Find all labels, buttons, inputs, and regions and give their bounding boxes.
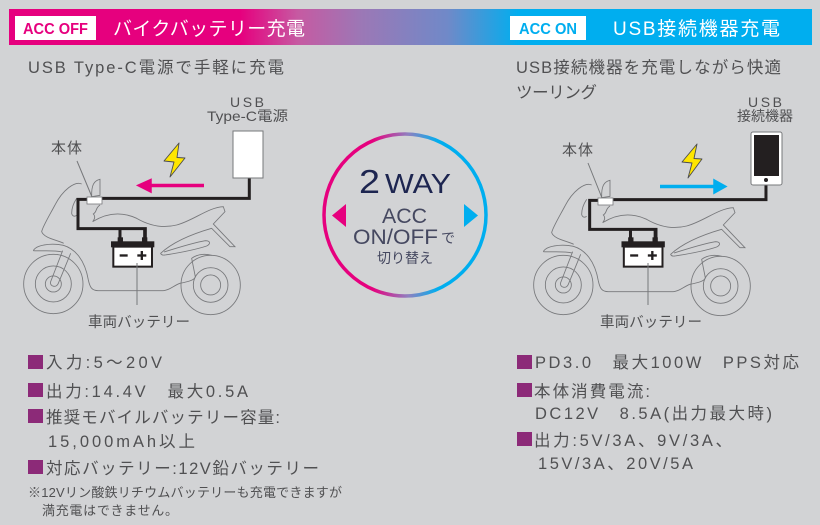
ring xyxy=(324,134,486,296)
text: ACC ON/OFF switching: ACC xyxy=(382,205,427,228)
spec: current consumption xyxy=(517,382,772,423)
text: ACC ON/OFF switching xyxy=(353,205,455,266)
spec list: ACC ON xyxy=(517,353,800,473)
label: USB device xyxy=(737,94,793,124)
motorcycle outline xyxy=(534,180,750,316)
text: ACC ON/OFF switching: ON/OFF xyxy=(353,226,438,249)
icon: smartphone xyxy=(751,132,782,185)
spec: current consumption: DC12V 8.5A(出力最大時) xyxy=(535,404,772,423)
badge: ACC OFF: ACC OFF xyxy=(23,21,88,38)
spec: current consumption: 本体消費電流: xyxy=(534,382,650,401)
motorcycle outline xyxy=(24,179,240,315)
wiring xyxy=(78,178,249,238)
badge: ACC ON: ACC ON xyxy=(519,21,577,38)
unit box xyxy=(598,198,613,205)
label: USB device: USB xyxy=(748,94,782,110)
label: USB Type-C power: Type-C電源 xyxy=(207,108,288,124)
text: ACC ON/OFF switching: で xyxy=(441,230,455,246)
spec: recommended capacity: 推奨モバイルバッテリー容量: xyxy=(46,408,280,427)
spec: recommended capacity xyxy=(28,408,280,451)
arrow: right blue xyxy=(464,204,478,227)
right subheading: USB接続機器を充電しながら快適 xyxy=(516,58,781,77)
arrow: blue rightward xyxy=(660,182,724,192)
icon: lightning bolt xyxy=(164,143,185,177)
wiring xyxy=(590,185,766,238)
center badge: 2WAY xyxy=(324,134,486,296)
spec: PD: PD3.0 最大100W PPS対応 xyxy=(535,353,800,372)
arrow: left pink xyxy=(332,204,346,227)
diagram: ACC OFF charging xyxy=(24,94,288,331)
label: USB Type-C power xyxy=(207,94,288,124)
spec: input: 入力:5〜20V xyxy=(46,353,162,372)
title: 2WAY xyxy=(359,163,451,200)
spec list: ACC OFF xyxy=(28,353,342,518)
icon: lightning bolt xyxy=(682,144,702,178)
spec: supported battery: 対応バッテリー:12V鉛バッテリー xyxy=(46,459,319,478)
label: main unit: 本体 xyxy=(51,140,82,157)
spec: output: 15V/3A、20V/5A xyxy=(538,455,693,473)
title: 2WAY: WAY xyxy=(385,168,451,199)
diagram: ACC ON charging xyxy=(534,94,793,331)
badge: ACC OFF xyxy=(15,16,96,40)
leader lines xyxy=(77,161,137,305)
spec: output xyxy=(517,431,732,473)
icon: USB power supply xyxy=(233,131,263,178)
title: 2WAY: 2 xyxy=(359,163,380,200)
unit box xyxy=(87,197,102,204)
footnote xyxy=(28,485,342,518)
label: USB device: 接続機器 xyxy=(737,108,793,124)
footnote: 満充電はできません。 xyxy=(42,503,178,518)
spec: output: 出力:5V/3A、9V/3A、 xyxy=(534,431,732,450)
label: main unit: 本体 xyxy=(562,142,593,159)
left subheading: USB Type-C電源で手軽に充電 xyxy=(28,58,284,77)
text: ACC ON/OFF switching: 切り替え xyxy=(377,250,433,266)
footnote: ※12Vリン酸鉄リチウムバッテリーも充電できますが xyxy=(28,485,342,500)
heading: USB device charging: USB接続機器充電 xyxy=(613,18,780,40)
right subheading: ツーリング xyxy=(516,83,597,102)
icon: battery xyxy=(111,229,154,267)
spec: recommended capacity: 15,000mAh以上 xyxy=(48,432,195,451)
icon: battery xyxy=(621,229,665,267)
arrow: pink leftward xyxy=(140,181,204,190)
label: vehicle battery: 車両バッテリー xyxy=(600,314,702,331)
header band xyxy=(9,9,812,45)
right subheading xyxy=(516,58,781,102)
spec: output: 出力:14.4V 最大0.5A xyxy=(46,382,248,401)
badge: ACC ON xyxy=(510,16,586,40)
leader lines xyxy=(588,163,648,305)
label: vehicle battery: 車両バッテリー xyxy=(88,314,190,331)
label: USB Type-C power: USB xyxy=(230,94,264,110)
heading: bike battery charging: バイクバッテリー充電 xyxy=(113,18,305,40)
